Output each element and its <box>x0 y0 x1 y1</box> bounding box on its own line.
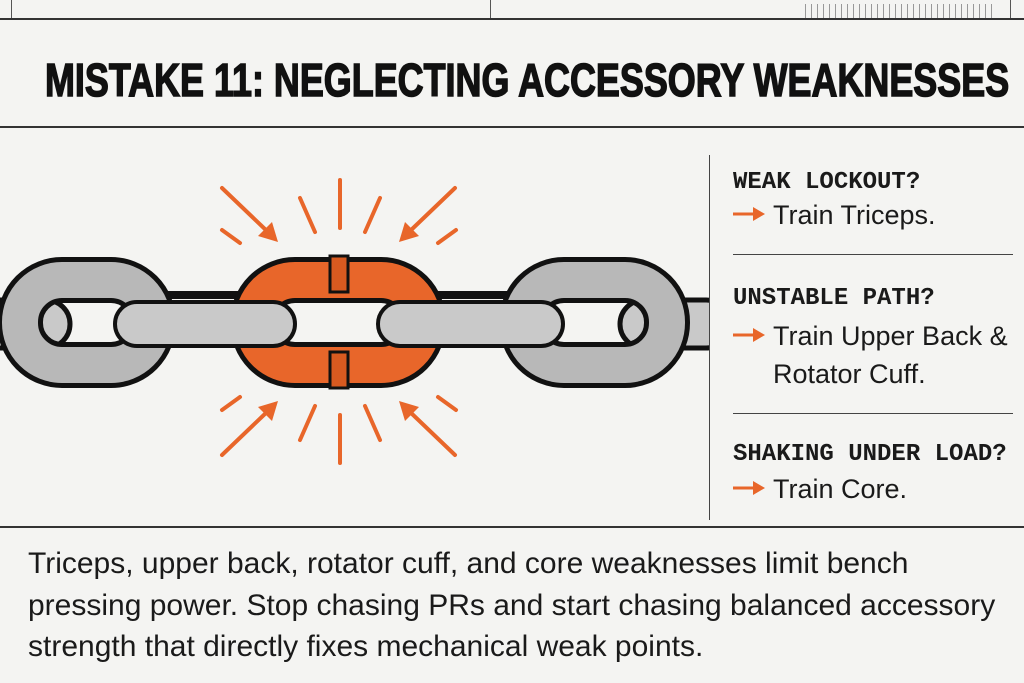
side links <box>0 295 730 348</box>
item 1: WEAK LOCKOUT? <box>733 169 920 196</box>
top strip <box>0 0 1024 20</box>
chain illustration <box>0 178 709 465</box>
item 3: SHAKING UNDER LOAD? <box>733 441 1007 468</box>
panel: weak points list: Train Triceps. <box>773 200 936 230</box>
arrows <box>222 180 456 463</box>
panel: weak points list: Train Core. <box>773 474 907 504</box>
summary text <box>28 547 996 663</box>
summary text: pressing power. Stop chasing PRs and start chasing balanced accessory <box>28 588 995 622</box>
summary text: Triceps, upper back, rotator cuff, and core weaknesses limit bench <box>28 547 908 580</box>
divider vertical <box>709 155 710 520</box>
summary text: strength that directly fixes mechanical weak points. <box>28 630 703 663</box>
item 2: UNSTABLE PATH? <box>733 285 935 312</box>
title: MISTAKE 11: NEGLECTING ACCESSORY WEAKNESSES <box>45 54 1009 106</box>
panel: weak points list: Train Upper Back & <box>773 321 1008 351</box>
panel: weak points list: Rotator Cuff. <box>773 359 926 389</box>
panel: weak points list <box>733 169 1013 504</box>
big links <box>20 280 667 365</box>
